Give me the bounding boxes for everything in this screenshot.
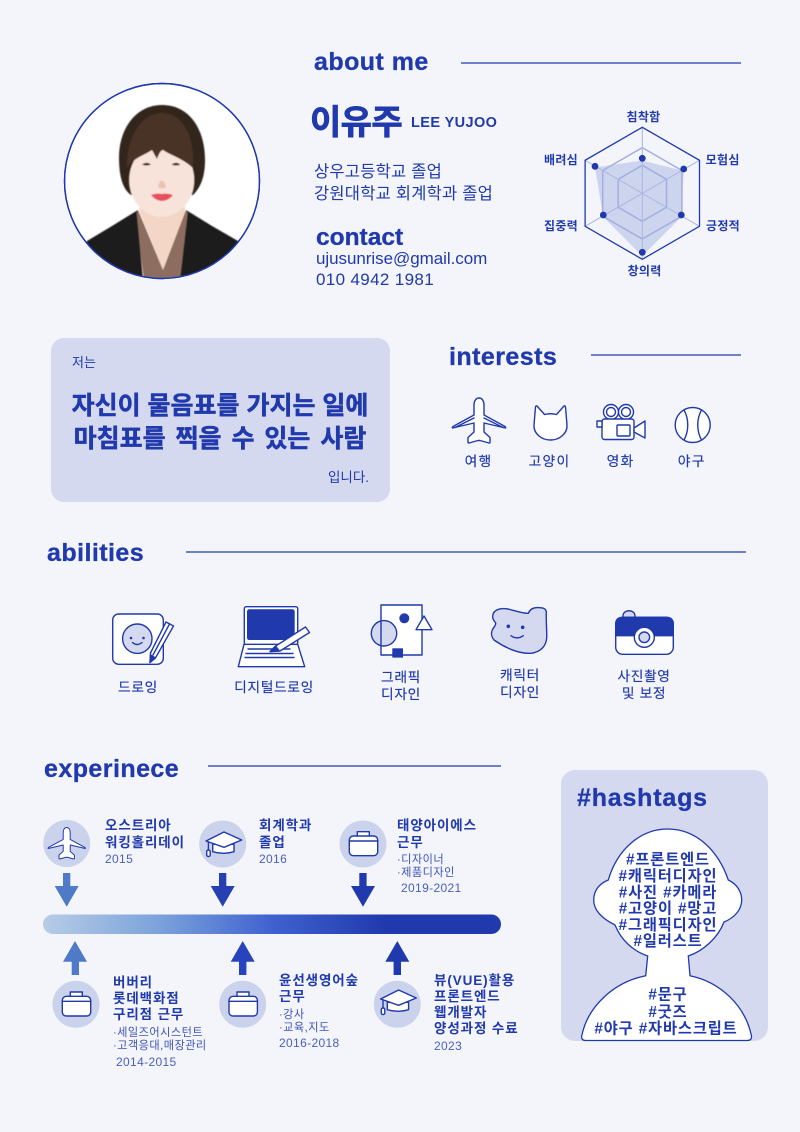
contact (316, 224, 487, 289)
abilities labels: 디자인 (500, 685, 540, 700)
item: english forest: ·교육,지도 (279, 1021, 330, 1034)
item: frontend course (374, 941, 519, 1053)
interests labels: 고양이 (529, 454, 570, 469)
radar chart: 긍정적 (706, 219, 740, 233)
hashtag words: #야구 #자바스크립트 (594, 1020, 738, 1038)
icon: graphic design (371, 605, 432, 658)
radar chart: 모험심 (706, 152, 740, 167)
radar chart: 침착함 (626, 109, 661, 124)
person silhouette (582, 829, 752, 1040)
item: accounting degree (199, 818, 312, 907)
item: english forest: 2016-2018 (279, 1036, 340, 1050)
hashtag words: #프론트엔드 (626, 852, 710, 868)
item: english forest: 근무 (279, 989, 306, 1004)
icon: plane (452, 398, 506, 443)
item: burberry: ·고객응대,매장관리 (113, 1039, 207, 1052)
abilities labels: 사진촬영 (617, 669, 671, 684)
panel: hashtags (561, 770, 768, 1041)
item: english forest: ·강사 (279, 1008, 305, 1021)
item: taeyang IS: 2019-2021 (401, 881, 462, 895)
education text: 상우고등학교 졸업 (314, 162, 442, 181)
abilities labels: 및 보정 (622, 686, 666, 701)
abilities labels (118, 668, 671, 702)
abilities labels: 캐릭터 (500, 668, 540, 683)
item: accounting degree: 회계학과 (259, 818, 312, 833)
timeline bar (43, 914, 501, 934)
interests labels: 야구 (678, 454, 706, 469)
item: burberry: ·세일즈어시스턴트 (113, 1025, 203, 1039)
name: 이유주 (310, 104, 402, 142)
item: austria: 2015 (105, 852, 133, 866)
item: burberry: 버버리 (113, 975, 153, 990)
education text (314, 162, 493, 203)
item: accounting degree: 2016 (259, 852, 287, 866)
panel: statement: 입니다. (328, 470, 369, 485)
radar chart (544, 109, 740, 278)
item: burberry: 2014-2015 (116, 1055, 177, 1069)
item: austria: 오스트리아 (105, 818, 172, 833)
hashtag words: #굿즈 (648, 1004, 688, 1021)
contact: contact (316, 224, 403, 251)
abilities labels: 디지털드로잉 (234, 680, 314, 695)
item: accounting degree: 졸업 (259, 835, 286, 850)
item: burberry: 구리점 근무 (113, 1007, 184, 1022)
heading: experience: experinece (44, 755, 179, 783)
hashtag words: #그래픽디자인 (619, 917, 717, 934)
item: burberry: 롯데백화점 (113, 991, 180, 1006)
icon: cat (534, 406, 567, 440)
heading: abilities: abilities (47, 539, 144, 567)
hashtag words (594, 852, 738, 1038)
interests labels: 여행 (465, 454, 492, 469)
item: taeyang IS: ·디자이너 (397, 853, 444, 866)
heading: interests: interests (449, 343, 557, 371)
icon: baseball (675, 408, 710, 442)
item: taeyang IS: 근무 (397, 835, 424, 850)
item: english forest: 윤선생영어숲 (279, 973, 359, 988)
name: LEE YUJOO (411, 115, 497, 131)
item: taeyang IS: 태양아이에스 (397, 818, 477, 833)
item: frontend course: 2023 (434, 1039, 462, 1053)
item: burberry (52, 941, 207, 1069)
item: frontend course: 웹개발자 (434, 1005, 487, 1020)
icon: photo camera (616, 611, 673, 654)
contact: ujusunrise@gmail.com (316, 249, 487, 268)
panel: statement (51, 338, 390, 502)
item: frontend course: 양성과정 수료 (434, 1021, 519, 1036)
hashtag words: #캐릭터디자인 (619, 868, 717, 885)
icon: movie camera (597, 404, 645, 440)
item: austria (43, 818, 185, 907)
item: frontend course: 뷰(VUE)활용 (434, 973, 515, 988)
interests labels: 영화 (607, 454, 634, 469)
heading: about me: about me (314, 48, 429, 76)
profile photo (64, 84, 260, 280)
interests labels (465, 454, 706, 469)
item: frontend course: 프론트엔드 (434, 989, 501, 1004)
icon: drawing (113, 614, 174, 664)
abilities labels: 드로잉 (118, 680, 158, 695)
hashtag words: #일러스트 (633, 933, 703, 950)
item: english forest (219, 941, 359, 1050)
education text: 강원대학교 회계학과 졸업 (314, 184, 493, 203)
hashtag words: #사진 #카메라 (619, 884, 717, 902)
contact: 010 4942 1981 (316, 270, 434, 289)
name (310, 104, 497, 142)
item: taeyang IS: ·제품디자인 (397, 866, 455, 879)
abilities labels: 디자인 (381, 687, 421, 702)
panel: statement: 자신이 물음표를 가지는 일에 (72, 392, 368, 420)
radar chart: 창의력 (628, 263, 662, 278)
hashtag words: #문구 (648, 986, 688, 1004)
radar chart: 집중력 (544, 219, 578, 233)
abilities labels: 그래픽 (381, 670, 421, 685)
panel: statement: 저는 (72, 355, 96, 370)
icon: digital drawing (238, 607, 310, 667)
icon: character (492, 608, 547, 653)
item: taeyang IS (340, 818, 477, 907)
heading: hashtags: #hashtags (577, 784, 708, 812)
item: austria: 워킹홀리데이 (105, 835, 185, 850)
radar chart: 배려심 (544, 153, 578, 167)
hashtag words: #고양이 #망고 (619, 900, 717, 918)
panel: statement: 마침표를 찍을 수 있는 사람 (74, 425, 366, 453)
